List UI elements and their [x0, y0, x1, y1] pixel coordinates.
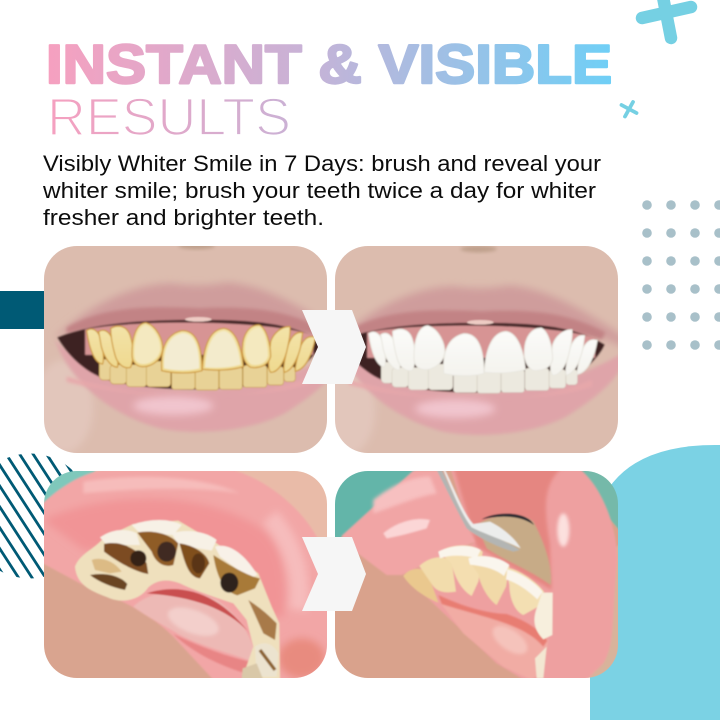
title line two: RESULTS	[47, 88, 291, 147]
decoration: cyan quarter blob	[590, 445, 720, 720]
icon: small cyan cross	[622, 102, 636, 116]
decoration: dot grid	[642, 200, 720, 350]
body text: Visibly Whiter Smile in 7 Days: brush and reveal your	[43, 151, 601, 176]
arrow: bottom row	[302, 537, 366, 611]
title line one: INSTANT & VISIBLE	[46, 33, 612, 95]
body text: fresher and brighter teeth.	[43, 205, 324, 230]
body text	[42, 151, 601, 230]
panel: white teeth after	[335, 246, 618, 453]
arrow: top row	[302, 310, 366, 384]
panel: clean lower teeth after	[335, 471, 618, 678]
body text: whiter smile; brush your teeth twice a day for whiter	[42, 178, 596, 203]
decoration: teal block	[0, 291, 46, 329]
decoration: striped circle	[0, 454, 73, 578]
icon: large cyan cross	[642, 0, 691, 38]
panel: yellow teeth before	[44, 246, 327, 453]
panel: stained teeth before	[44, 471, 327, 678]
